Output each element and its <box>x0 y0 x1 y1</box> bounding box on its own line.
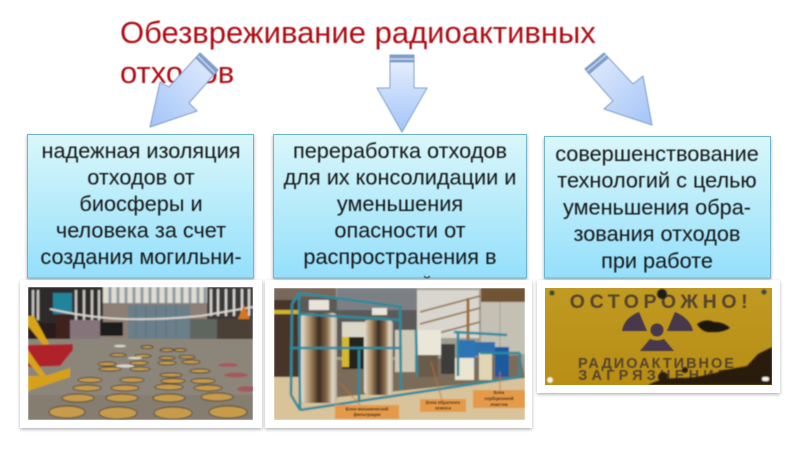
photo card: waste storage <box>20 280 262 428</box>
text: technology <box>555 141 759 273</box>
photo card: warning sign: ОСТОРОЖНО! <box>570 291 752 313</box>
photo card: processing plant <box>265 280 532 428</box>
text: isolation: создания могильни- <box>40 244 242 269</box>
title <box>120 15 596 90</box>
breve fragment of clipped sixth line <box>424 276 430 278</box>
photo card: warning sign: ЗАГРЯЗНЕНИЕ <box>578 368 732 384</box>
photo card: processing plant: фильтрации <box>353 412 381 417</box>
icon: radiation trefoil <box>622 312 693 351</box>
text: processing <box>284 138 516 269</box>
title: Обезвреживание радиоактивных <box>120 15 596 50</box>
text: processing: переработка отходов <box>293 138 507 163</box>
photo card: processing plant: Блок механической <box>346 406 389 412</box>
text: technology: при работе <box>601 248 713 273</box>
text: processing: для их консолидации и <box>284 164 516 190</box>
text: isolation: человека за счет <box>56 218 226 242</box>
text: processing: распространения в <box>303 244 497 269</box>
photo card: processing plant: Блок обратного <box>426 400 461 405</box>
arrow: left <box>150 53 218 127</box>
text: technology: совершенствование <box>555 141 759 166</box>
panel: technology text box <box>544 136 770 278</box>
text: isolation <box>40 138 242 269</box>
text: isolation: отходов от <box>87 164 195 190</box>
arrow: centre <box>377 55 427 132</box>
text: processing: уменьшения <box>337 191 463 216</box>
text: isolation: надежная изоляция <box>42 138 240 163</box>
photo card: warning sign: РАДИОАКТИВНОЕ <box>578 356 736 372</box>
photo card: processing plant: осмоса <box>435 406 451 410</box>
text: technology: технологий с целью <box>557 168 757 193</box>
panel: isolation text box <box>28 134 254 278</box>
photo card: processing plant: сорбционной <box>484 396 514 401</box>
text: technology: уменьшения обра- <box>563 194 751 219</box>
title: отходов <box>120 55 234 90</box>
photo card: warning sign <box>537 280 780 393</box>
text: technology: зования отходов <box>574 221 740 246</box>
text: isolation: биосферы и <box>79 191 203 216</box>
arrow: right <box>585 53 652 125</box>
text: processing: опасности от <box>334 218 466 242</box>
panel: processing text box <box>274 134 526 278</box>
photo card: processing plant: Блок <box>494 390 505 395</box>
photo card: processing plant: очистки <box>490 402 508 407</box>
